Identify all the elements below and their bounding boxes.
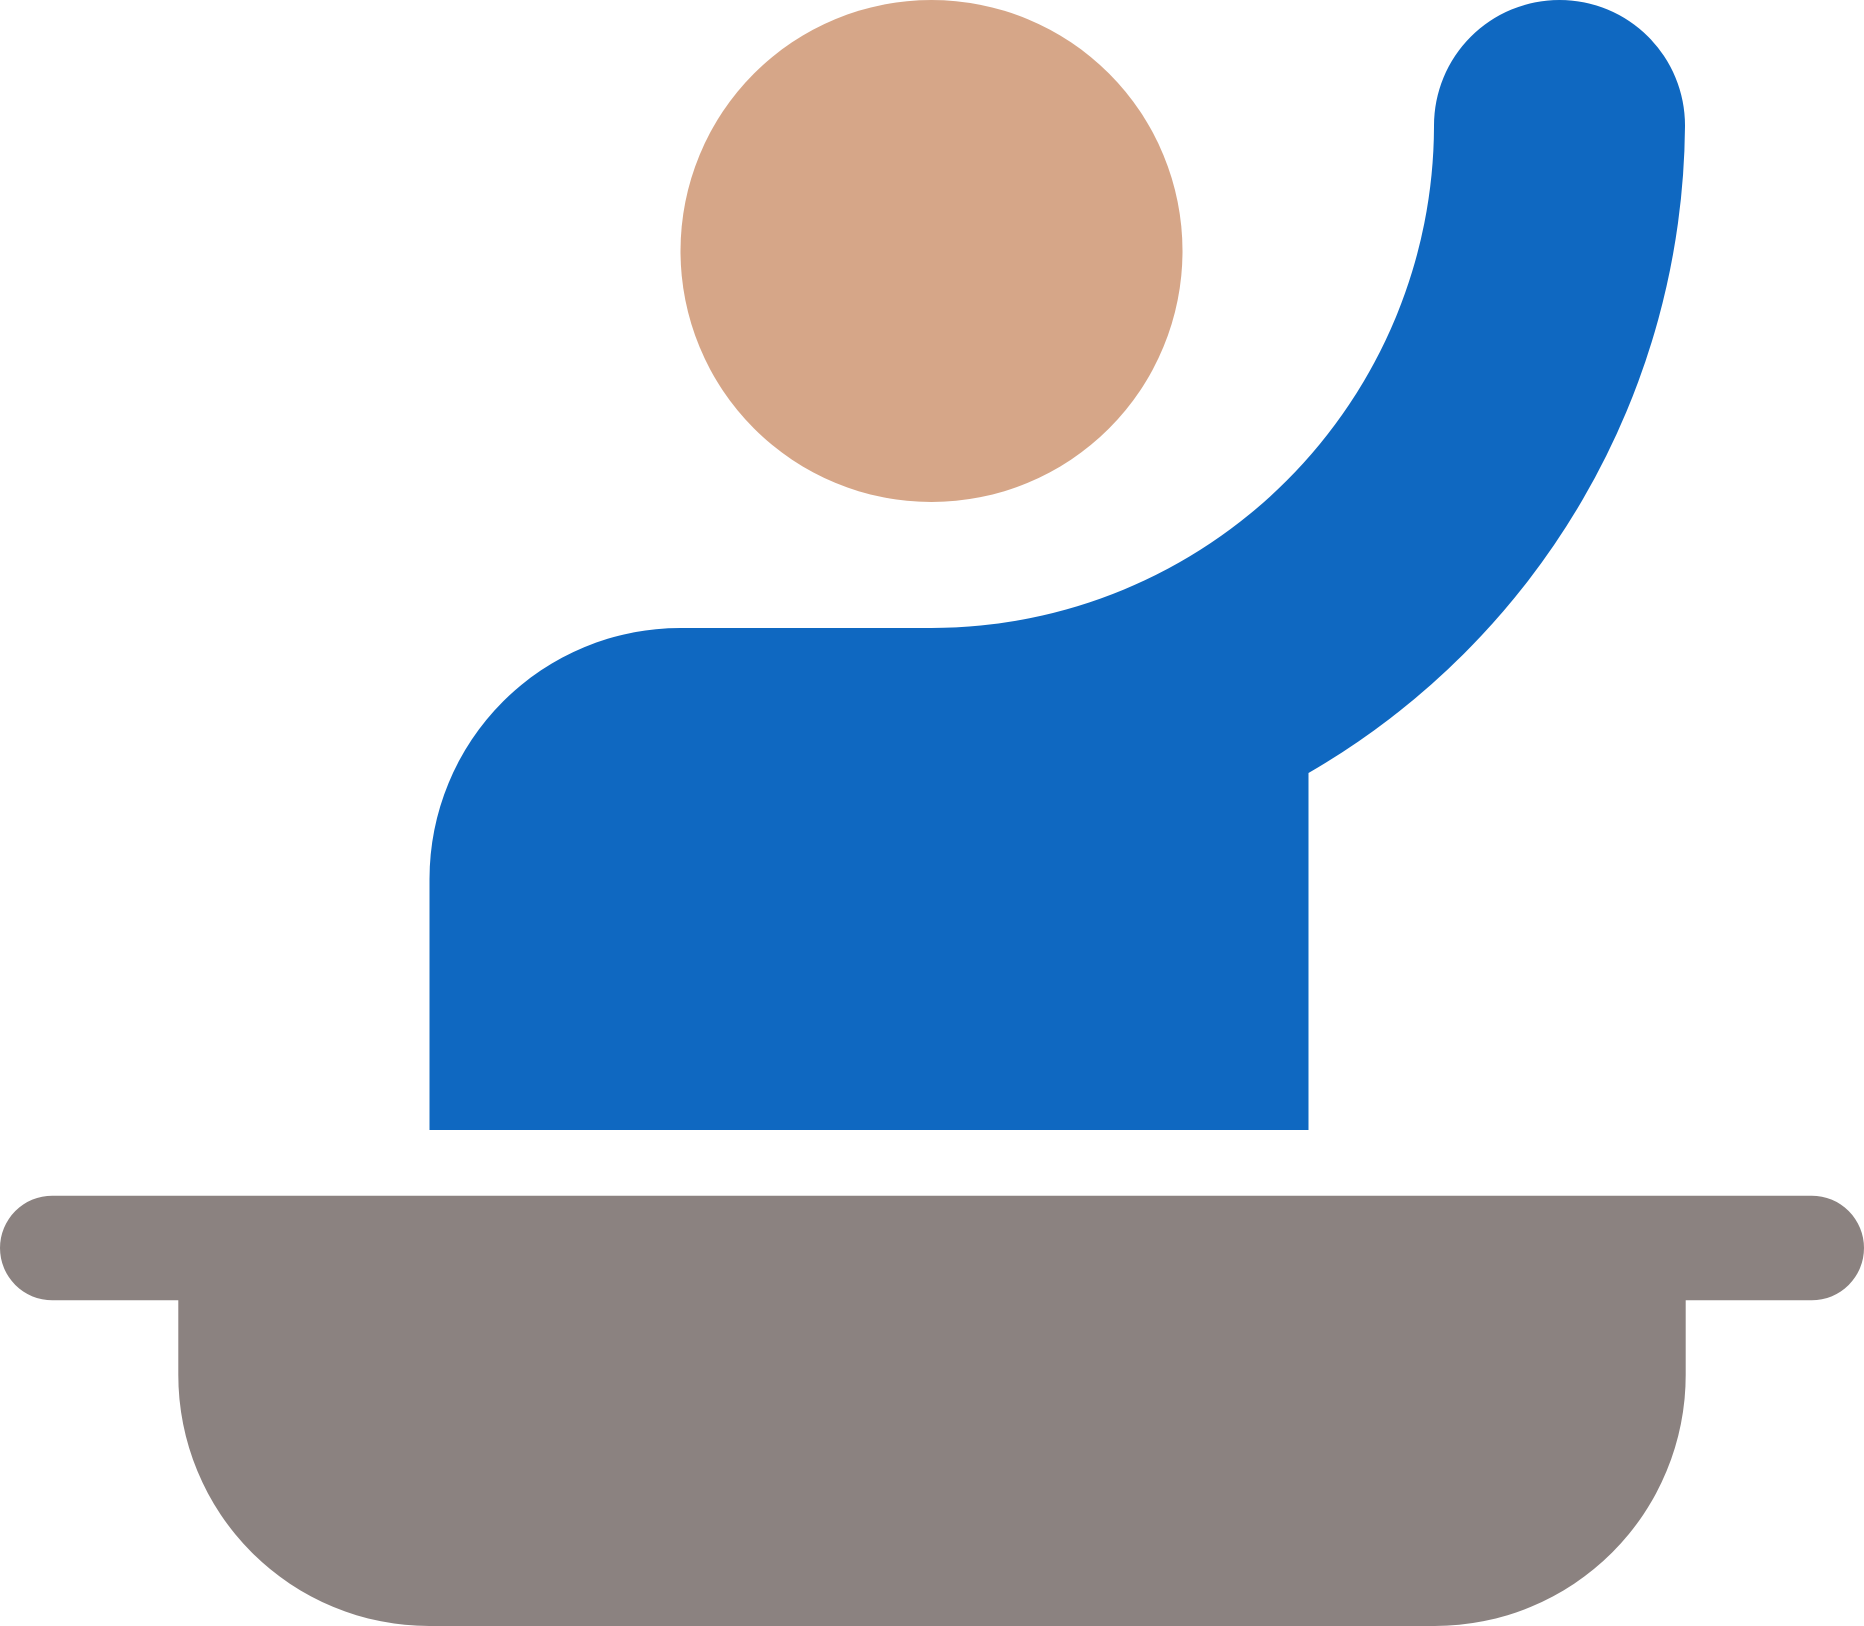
icon: lectern (0, 1196, 1864, 1626)
icon: person body with raised arm (430, 0, 1685, 1130)
icon: person head (680, 0, 1182, 502)
